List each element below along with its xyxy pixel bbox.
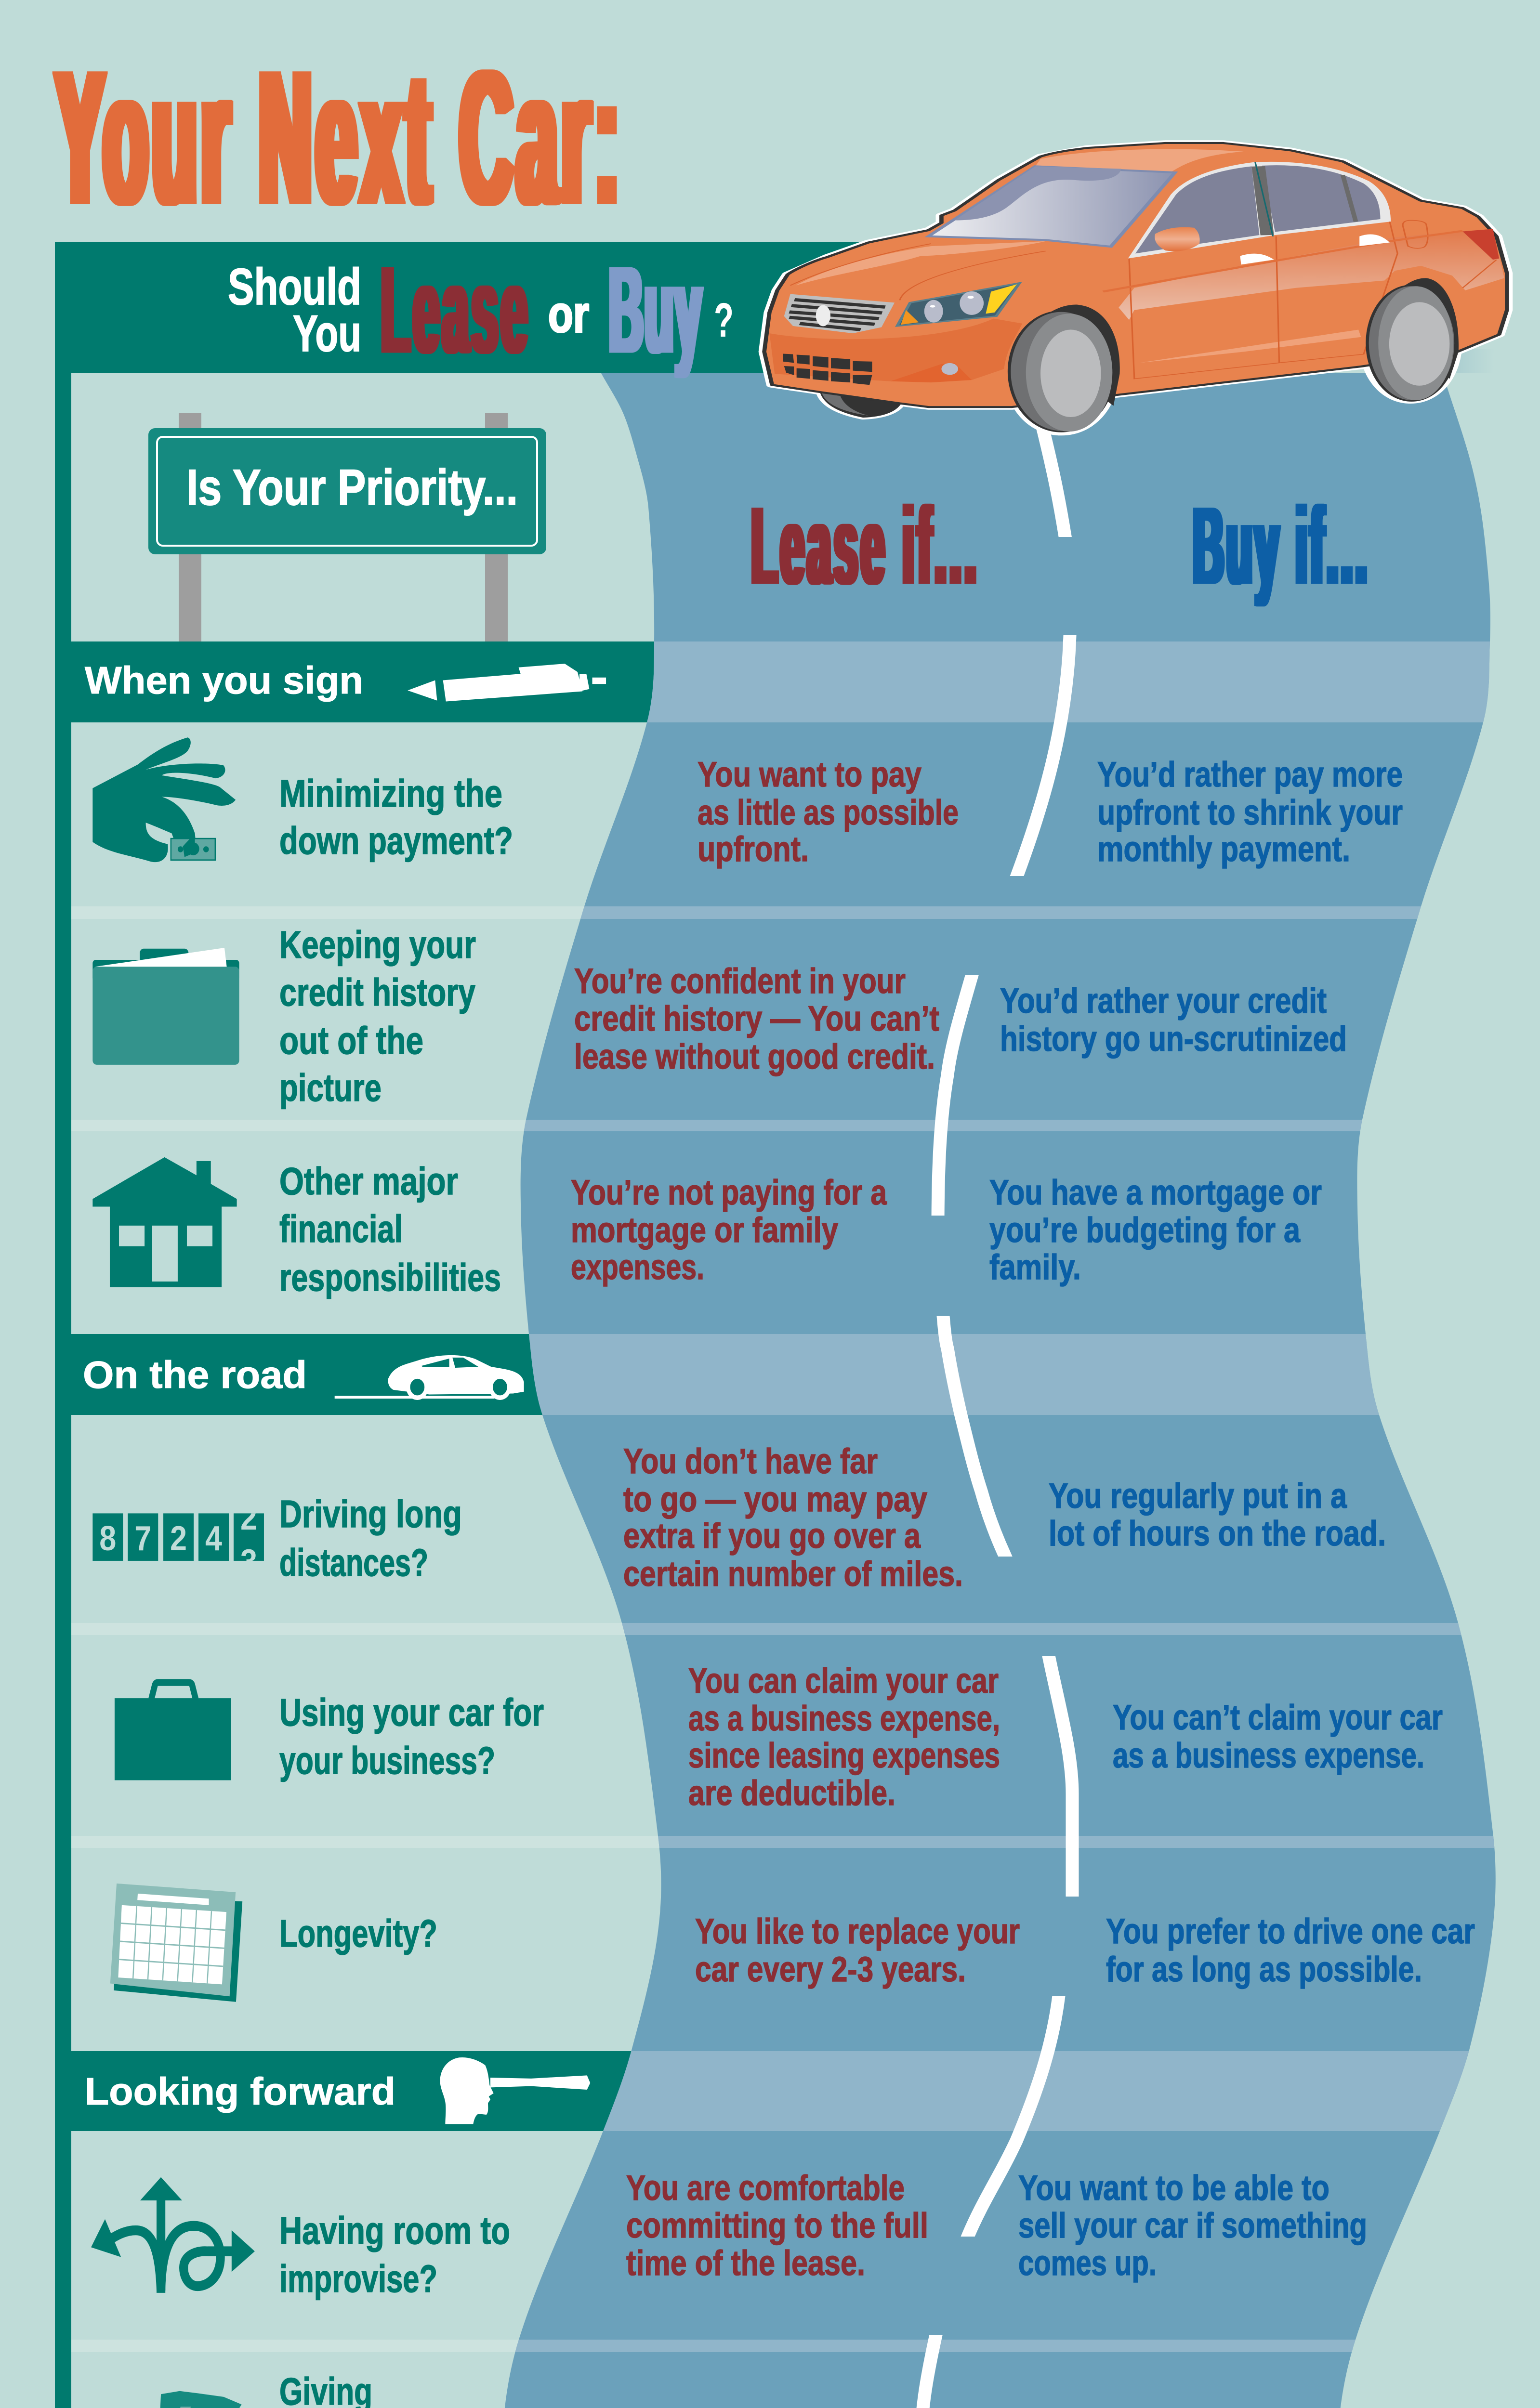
icon: car on road: [335, 1355, 524, 1400]
fog light: [890, 363, 972, 382]
question text: Driving long: [279, 1492, 462, 1535]
icon: calendar: [110, 1884, 242, 2002]
icon: branching arrows: [91, 2177, 255, 2293]
buy answer: [1106, 1912, 1475, 1989]
lease answer: You want to pay: [698, 755, 921, 794]
question text: Longevity?: [279, 1912, 437, 1955]
lease answer: [571, 1173, 887, 1287]
lease answer: [623, 1442, 963, 1594]
body crease: [1103, 231, 1462, 291]
road: [482, 373, 1540, 2408]
icon: hand with cash: [92, 737, 236, 862]
front left wheel: [822, 393, 900, 417]
question text: improvise?: [279, 2257, 437, 2300]
section band backgrounds: [55, 641, 698, 2352]
lease answer: to go — you may pay: [623, 1480, 927, 1519]
heading: should you lease or buy: [228, 241, 734, 378]
buy answer: [1049, 1477, 1386, 1553]
lease answer: You’re confident in your: [574, 962, 906, 1001]
icon: head with telescope: [440, 2057, 590, 2124]
row: other financial responsibilities: [92, 1157, 1322, 1299]
question text: Having room to: [279, 2209, 510, 2252]
buy answer: [1097, 755, 1403, 869]
buy answer: comes up.: [1018, 2244, 1157, 2283]
buy answer: You’d rather pay more: [1097, 755, 1403, 794]
icon: folder: [92, 948, 239, 1065]
side window frame and glass: [1128, 162, 1391, 259]
lower bumper: [769, 319, 1022, 381]
question text: [279, 772, 513, 862]
icon: hand holding money: [101, 2391, 257, 2408]
row: using your car for business: [115, 1662, 1443, 1813]
section: when you sign: [85, 659, 606, 702]
hood highlight: [795, 241, 1046, 286]
question text: [279, 2209, 510, 2300]
sign: is your priority: [148, 413, 546, 641]
lease answer: committing to the full: [626, 2206, 928, 2245]
lease answer: time of the lease.: [626, 2244, 865, 2283]
heading: should you lease or buy: Should: [228, 258, 361, 315]
question text: [279, 1691, 544, 1782]
row: credit history: [92, 923, 1347, 1109]
question text: distances?: [279, 1541, 428, 1584]
lease answer: You are comfortable: [626, 2169, 905, 2208]
sign: is your priority: Is Your Priority...: [186, 459, 518, 516]
lease answer: You’re not paying for a: [571, 1173, 887, 1212]
icon: odometer: 8: [99, 1519, 116, 1558]
lease answer: You can claim your car: [688, 1662, 999, 1701]
lease answer: lease without good credit.: [574, 1037, 935, 1076]
car body: [764, 143, 1507, 407]
buy answer: history go un-scrutinized: [1000, 1020, 1347, 1059]
icon: odometer: 2: [170, 1519, 187, 1558]
lease answer: upfront.: [698, 830, 809, 869]
section: looking forward: [85, 2057, 590, 2124]
question text: picture: [279, 1066, 382, 1109]
section: on the road: [83, 1353, 524, 1400]
headlight: [897, 283, 1020, 326]
buy answer: You have a mortgage or: [989, 1173, 1322, 1212]
icon: odometer: [92, 1498, 264, 1581]
question text: responsibilities: [279, 1256, 501, 1299]
buy answer: You prefer to drive one car: [1106, 1912, 1475, 1951]
door handles: [1240, 254, 1274, 264]
icon: pen: [408, 664, 606, 702]
lower air intake: [783, 353, 872, 385]
illustration: orange car: [764, 143, 1507, 433]
buy answer: You regularly put in a: [1049, 1477, 1347, 1516]
heading: should you lease or buy: Buy: [609, 241, 701, 378]
road centre line dashes: [921, 419, 1072, 2408]
question text: out of the: [279, 1019, 423, 1062]
buy answer: [1018, 2169, 1367, 2283]
buy answer: as a business expense.: [1113, 1736, 1424, 1775]
buy answer: [1000, 982, 1347, 1059]
section: when you sign: When you sign: [85, 659, 363, 702]
lease answer: as little as possible: [698, 793, 959, 832]
question text: [279, 1492, 462, 1584]
question text: Minimizing the: [279, 772, 502, 815]
row: head start on next purchase: [101, 2370, 1305, 2408]
heading: should you lease or buy: You: [293, 304, 361, 362]
column heading: lease if: Lease if...: [751, 485, 976, 607]
side reflection: [1119, 231, 1504, 320]
buy answer: you’re budgeting for a: [989, 1211, 1301, 1250]
rear wheel: [1367, 278, 1459, 401]
lease answer: car every 2-3 years.: [695, 1950, 966, 1989]
section: looking forward: Looking forward: [85, 2070, 395, 2113]
lease answer: mortgage or family: [571, 1211, 838, 1250]
question text: your business?: [279, 1739, 495, 1782]
section: on the road: On the road: [83, 1353, 307, 1396]
icon: odometer: 7: [134, 1519, 151, 1558]
buy answer: monthly payment.: [1097, 830, 1350, 869]
mirror: [1155, 227, 1200, 251]
buy answer: lot of hours on the road.: [1049, 1514, 1386, 1553]
icon: house: [92, 1157, 237, 1287]
lease answer: [626, 2169, 928, 2283]
lease answer: You don’t have far: [623, 1442, 878, 1481]
title: Your Next Car:: [56, 32, 619, 244]
buy answer: upfront to shrink your: [1097, 793, 1403, 832]
question text: financial: [279, 1207, 403, 1250]
lease answer: certain number of miles.: [623, 1555, 963, 1594]
buy answer: You’d rather your credit: [1000, 982, 1327, 1021]
heading: should you lease or buy: ?: [714, 293, 734, 347]
lease answer: [574, 962, 939, 1076]
tail light: [1462, 229, 1499, 260]
lease answer: [698, 755, 959, 869]
question text: [279, 923, 476, 1109]
question text: down payment?: [279, 819, 513, 862]
row: room to improvise: [91, 2169, 1367, 2300]
buy answer: You want to be able to: [1018, 2169, 1329, 2208]
lease answer: [695, 1912, 1020, 1989]
icon: odometer: 4: [205, 1519, 222, 1558]
row: driving long distances: [92, 1442, 1386, 1594]
row: longevity: [110, 1884, 1475, 2002]
lease answer: since leasing expenses: [688, 1736, 1000, 1775]
lease answer: credit history — You can’t: [574, 999, 939, 1038]
buy answer: family.: [989, 1248, 1081, 1287]
question text: [279, 1160, 501, 1299]
icon: odometer: 3: [240, 1542, 257, 1581]
row: minimizing the down payment: [92, 737, 1403, 869]
question text: credit history: [279, 971, 475, 1014]
buy answer: sell your car if something: [1018, 2206, 1367, 2245]
windshield: [928, 166, 1175, 247]
front wheel: [1009, 304, 1120, 432]
lease answer: as a business expense,: [688, 1699, 1000, 1738]
icon: odometer: 2: [240, 1498, 257, 1537]
lease answer: [688, 1662, 1000, 1813]
lease answer: You like to replace your: [695, 1912, 1020, 1951]
question text: Keeping your: [279, 923, 476, 966]
question text: Using your car for: [279, 1691, 544, 1734]
question text: Other major: [279, 1160, 458, 1203]
lease answer: expenses.: [571, 1248, 704, 1287]
car outline halo: [764, 143, 1507, 433]
buy answer: [989, 1173, 1322, 1287]
heading: should you lease or buy: or: [548, 285, 589, 343]
buy answer: for as long as possible.: [1106, 1950, 1422, 1989]
icon: briefcase: [115, 1683, 231, 1780]
column heading: buy if: Buy if...: [1193, 485, 1367, 607]
grille: [784, 294, 895, 333]
buy answer: You can’t claim your car: [1113, 1698, 1443, 1737]
lease answer: extra if you go over a: [623, 1517, 921, 1556]
door lines: [790, 221, 1497, 379]
lease answer: are deductible.: [688, 1774, 895, 1813]
heading: should you lease or buy: Lease: [381, 241, 527, 378]
buy answer: [1113, 1698, 1443, 1775]
